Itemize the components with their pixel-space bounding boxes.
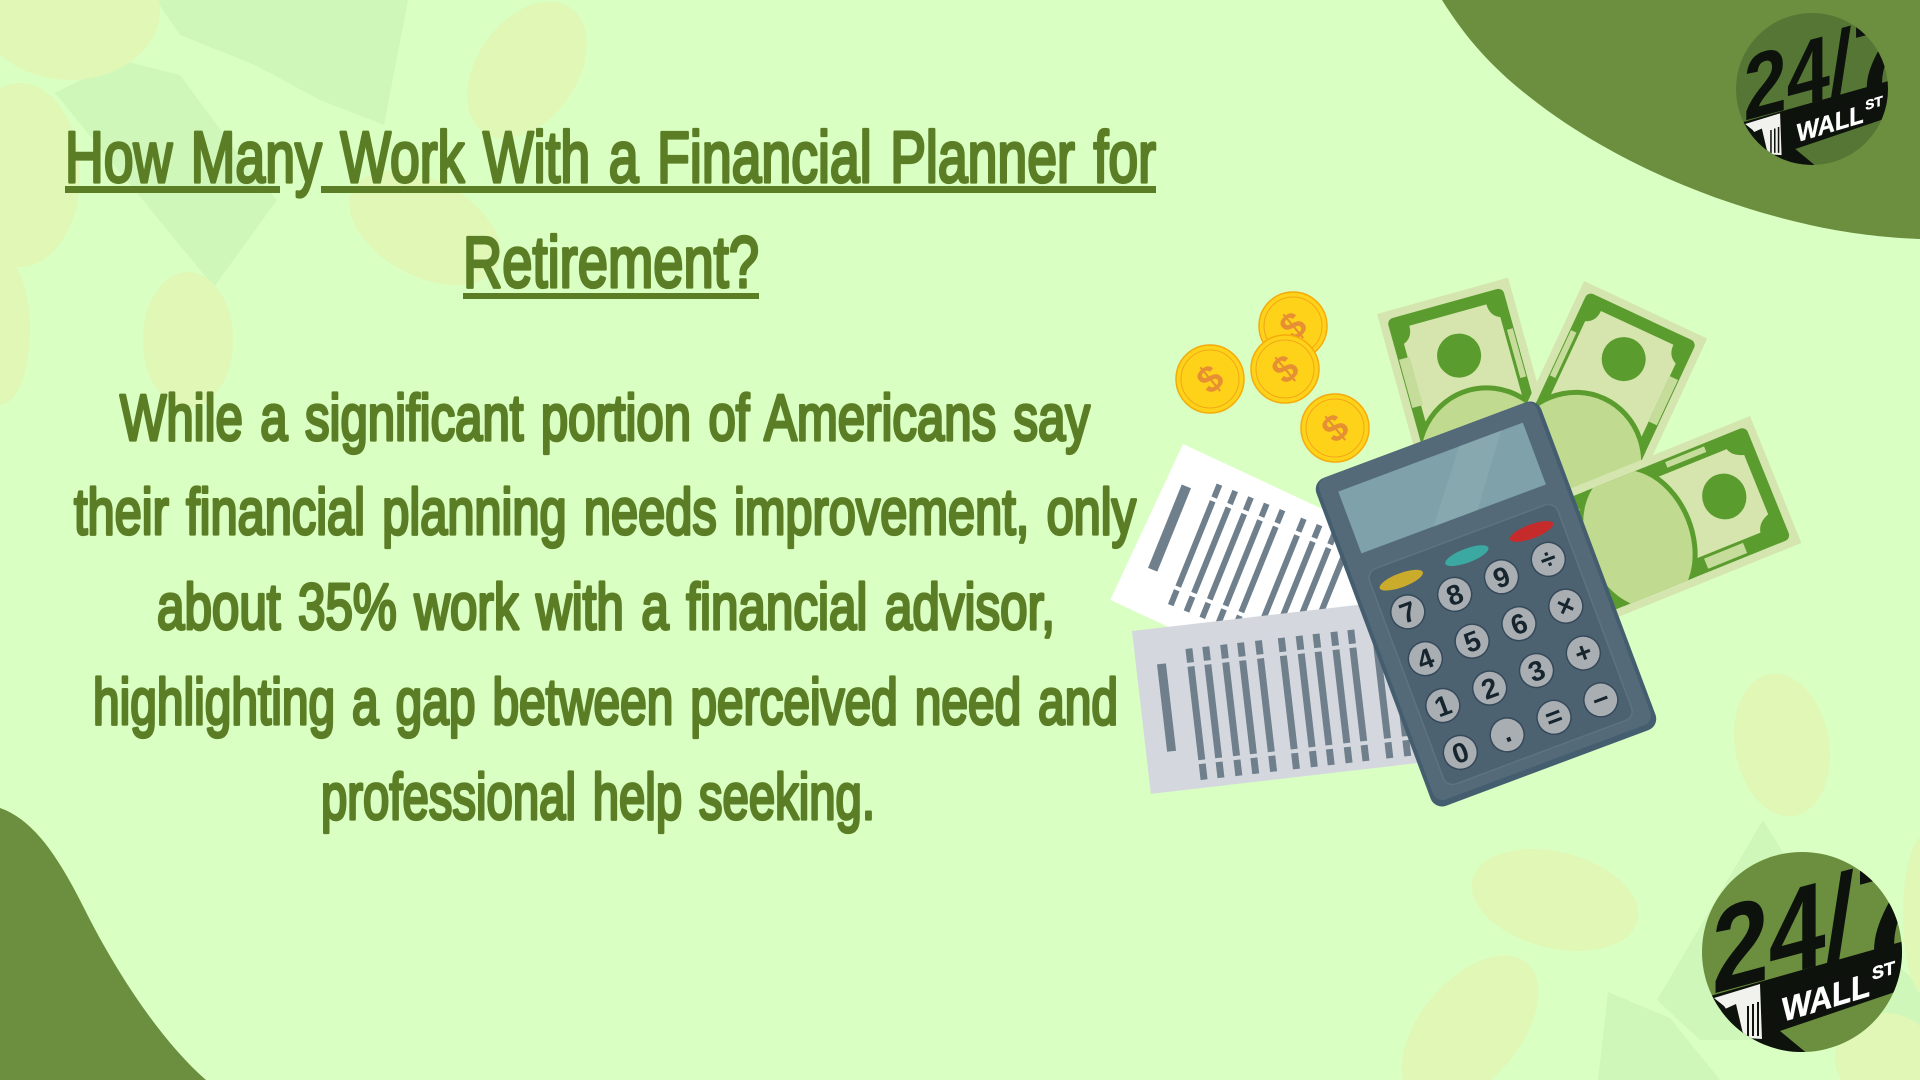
calculator keypad: 2 (1477, 671, 1503, 706)
logo: top right: 24/ (1744, 8, 1852, 141)
icon: coins: $ (1272, 304, 1315, 350)
logo: bottom right: 7 (1854, 827, 1920, 982)
calculator keypad: 1 (1430, 689, 1456, 723)
calculator keypad: 8 (1442, 578, 1468, 612)
logo: top right: WALL (1797, 99, 1864, 148)
calculator keypad: − (1588, 682, 1614, 717)
logo: top right: ST (1865, 92, 1883, 113)
logo: top right (1736, 13, 1888, 165)
corner shape: bottom left (0, 808, 206, 1080)
calculator keypad (1366, 502, 1635, 787)
calculator keypad: 3 (1524, 654, 1549, 688)
calculator keypad: + (1570, 635, 1596, 670)
title: Retirement? (463, 223, 759, 303)
logo: bottom right: ST (1872, 956, 1896, 984)
calculator keypad: 7 (1395, 595, 1421, 630)
logo: bottom right: WALL (1782, 967, 1870, 1030)
calculator keypad: × (1553, 588, 1579, 623)
icon: dollar bill right (1571, 416, 1802, 616)
icon: coins: $ (1314, 406, 1357, 452)
calculator screen (1338, 423, 1546, 553)
icon: coins: $ (1264, 347, 1307, 393)
icon: dollar bill middle (1528, 281, 1707, 488)
logo: bottom right: 24/ (1712, 848, 1854, 1021)
body text (74, 381, 1136, 833)
body text: highlighting a gap between perceived need and (93, 665, 1118, 738)
calculator keypad: 9 (1489, 560, 1514, 595)
icon: white receipt (1110, 444, 1401, 701)
logo: bottom right (1702, 852, 1902, 1052)
body text: professional help seeking. (321, 760, 875, 833)
calculator keypad: = (1541, 700, 1567, 734)
body text: While a significant portion of Americans say (120, 381, 1090, 454)
body text: about 35% work with a financial advisor, (157, 570, 1055, 643)
calculator keypad: 6 (1506, 607, 1532, 641)
title (65, 118, 1156, 303)
calculator keypad: 4 (1413, 642, 1439, 676)
corner shape: top right (1442, 0, 1920, 239)
title: How Many Work With a Financial Planner for (65, 118, 1156, 198)
icon: calculator (1312, 398, 1660, 810)
calculator keypad: . (1497, 717, 1515, 748)
calculator keypad: 5 (1460, 624, 1485, 659)
icon: coins (1176, 292, 1369, 462)
calculator keypad: ÷ (1536, 542, 1561, 576)
icon: coins: $ (1189, 357, 1232, 403)
icon: grey receipt (1132, 598, 1439, 794)
calculator keypad: 0 (1448, 736, 1473, 770)
illustration: money and calculator (1110, 277, 1805, 810)
icon: dollar bill left (1377, 278, 1537, 444)
body text: their financial planning needs improvement, only (74, 475, 1136, 548)
